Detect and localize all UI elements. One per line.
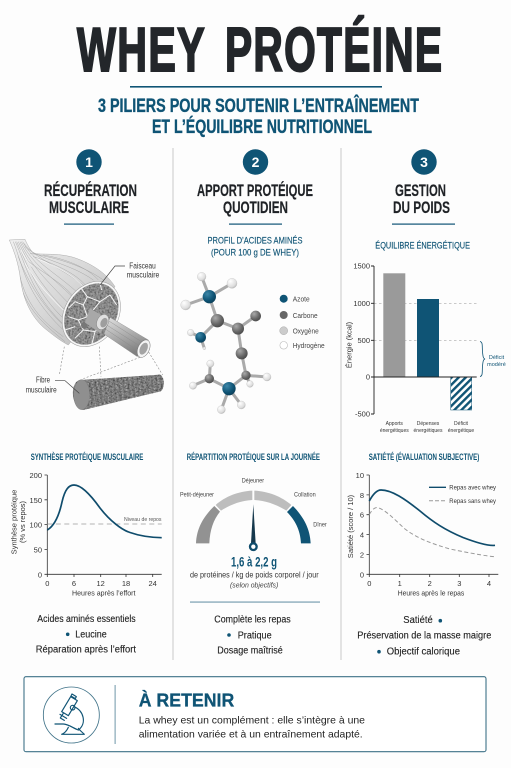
label: faisceau musculaire	[127, 261, 160, 280]
gauge: répartition protéique: 1,6 à 2,2 g	[231, 553, 277, 569]
chart: satiété: 1	[398, 579, 402, 588]
chart: équilibre énergétique: 1000	[353, 299, 370, 308]
chart: équilibre énergétique: Dépenses	[417, 421, 440, 427]
number badge 1	[76, 149, 102, 175]
chart: satiété: 4	[487, 579, 491, 588]
number badge 2: 2	[252, 154, 260, 170]
label: faisceau musculaire: musculaire	[127, 271, 160, 280]
gauge: répartition protéique: Collation	[294, 492, 316, 498]
panel: apport protéique quotidien	[180, 149, 327, 656]
heading: profil d'acides aminés: PROFIL D’ACIDES AMINÉS	[208, 236, 302, 246]
molecule	[181, 272, 271, 414]
key points: gestion du poids: Préservation de la masse maigre	[357, 631, 492, 642]
title: PROTÉINE	[225, 17, 443, 85]
label: faisceau musculaire: Faisceau	[129, 261, 156, 270]
molecule legend	[280, 294, 325, 350]
gauge: répartition protéique: Dîner	[313, 522, 327, 528]
heading: récupération musculaire: RÉCUPÉRATION	[44, 181, 137, 200]
number badge 1: 1	[85, 154, 93, 170]
bar: apports énergétiques	[383, 273, 405, 377]
chart: synthèse protéique musculaire: 6	[72, 579, 76, 588]
heading: récupération musculaire	[44, 181, 137, 225]
chart: synthèse protéique musculaire	[10, 452, 162, 598]
panel: récupération musculaire	[9, 149, 164, 655]
key points: gestion du poids: Objectif calorique	[387, 646, 460, 657]
chart: satiété: 0	[367, 579, 371, 588]
key points: gestion du poids	[357, 615, 492, 657]
gauge: répartition protéique: (selon objectifs)	[230, 581, 279, 590]
label: fibre musculaire: musculaire	[26, 385, 57, 394]
icon: microscope	[43, 687, 99, 743]
gauge: répartition protéique	[180, 452, 327, 602]
key points: apport: Pratique	[238, 630, 272, 641]
chart: équilibre énergétique: Déficit	[454, 421, 469, 427]
callout: à retenir: À RETENIR	[139, 690, 234, 711]
subtitle	[98, 86, 419, 138]
chart: synthèse protéique musculaire: Synthèse protéique	[10, 490, 18, 554]
key points: apport: Dosage maîtrisé	[217, 645, 283, 656]
number badge 3: 3	[420, 154, 428, 170]
panel: gestion du poids	[344, 149, 506, 657]
gauge: répartition protéique: Petit-déjeuner	[180, 492, 214, 498]
bar: déficit énergétique	[451, 377, 472, 410]
key points: récupération: Réparation après l’effort	[36, 644, 136, 655]
heading: apport protéique quotidien: QUOTIDIEN	[223, 199, 288, 217]
chart: satiété: 4	[360, 531, 364, 540]
chart: équilibre énergétique: 500	[357, 336, 370, 345]
chart: équilibre énergétique: ÉQUILIBRE ÉNERGÉTIQUE	[375, 240, 470, 251]
label: fibre musculaire	[26, 375, 57, 394]
number badge 3	[411, 149, 437, 175]
number badge 2	[243, 149, 268, 175]
key points: apport: Complète les repas	[214, 615, 291, 626]
chart: équilibre énergétique: -500	[355, 410, 370, 418]
callout: à retenir: La whey est un complément : elle s’intègre à une	[139, 714, 365, 726]
chart: équilibre énergétique: Énergie (kcal)	[344, 321, 354, 368]
key points: récupération: Acides aminés essentiels	[37, 614, 136, 625]
subtitle: 3 PILIERS POUR SOUTENIR L’ENTRAÎNEMENT	[98, 95, 419, 117]
label: fibre musculaire: Fibre	[36, 375, 50, 384]
molecule legend: Carbone	[293, 311, 318, 320]
title: WHEY	[77, 16, 206, 85]
gauge: répartition protéique: RÉPARTITION PROTÉIQUE SUR LA JOURNÉE	[187, 452, 320, 462]
chart: synthèse protéique musculaire: 0	[38, 570, 42, 579]
callout: à retenir	[24, 677, 486, 752]
chart: satiété: Heures après le repas	[398, 589, 465, 598]
chart: satiété: 8	[360, 491, 364, 500]
chart: synthèse protéique musculaire: 150	[29, 496, 42, 505]
chart: satiété: Satiété (score / 10)	[346, 494, 355, 558]
callout: à retenir: alimentation variée et à un entraînement adapté.	[139, 728, 363, 740]
chart: synthèse protéique musculaire: Heures après l’effort	[72, 589, 136, 598]
chart: satiété	[346, 452, 498, 598]
chart: satiété: 6	[360, 511, 364, 520]
muscle illustration	[9, 239, 164, 410]
chart legend	[429, 484, 497, 505]
chart legend: Repas sans whey	[449, 498, 497, 505]
key points: récupération	[36, 614, 136, 655]
chart: synthèse protéique musculaire: 200	[29, 471, 42, 480]
chart: synthèse protéique musculaire: Niveau de repos	[124, 517, 162, 523]
chart: synthèse protéique musculaire: (% vs repos)	[18, 500, 27, 543]
chart: satiété: 2	[428, 579, 432, 588]
key points: gestion du poids: Satiété	[403, 615, 433, 626]
heading: profil d'acides aminés: (POUR 100 g DE WHEY)	[211, 248, 299, 259]
chart: satiété: 3	[457, 579, 461, 588]
key points: récupération: Leucine	[75, 629, 107, 640]
chart: synthèse protéique musculaire: 24	[149, 579, 157, 588]
molecule legend: Oxygène	[293, 326, 319, 336]
heading: profil d'acides aminés	[208, 236, 302, 259]
molecule legend: Azote	[293, 294, 310, 304]
chart: équilibre énergétique: Apports	[386, 421, 403, 427]
molecule legend: Hydrogène	[293, 341, 325, 350]
chart: équilibre énergétique: énergétique	[448, 428, 474, 434]
chart: synthèse protéique musculaire: 100	[29, 521, 42, 530]
chart: satiété: 0	[360, 570, 364, 579]
chart: équilibre énergétique: modéré	[487, 362, 506, 368]
chart: satiété: 10	[356, 471, 364, 480]
chart: équilibre énergétique: 1500	[353, 262, 370, 270]
chart: synthèse protéique musculaire: 12	[97, 579, 105, 588]
subtitle: ET L’ÉQUILIBRE NUTRITIONNEL	[152, 116, 372, 138]
chart: équilibre énergétique: 0	[366, 372, 370, 382]
heading: récupération musculaire: MUSCULAIRE	[49, 199, 129, 217]
chart: équilibre énergétique: énergétiques	[414, 428, 443, 434]
bar: dépenses énergétiques	[417, 299, 439, 377]
chart: équilibre énergétique: Déficit	[489, 355, 505, 361]
heading: apport protéique quotidien: APPORT PROTÉIQUE	[197, 181, 313, 200]
chart: équilibre énergétique	[344, 240, 506, 434]
heading: gestion du poids	[392, 182, 455, 225]
title	[77, 16, 443, 85]
chart: synthèse protéique musculaire: 18	[122, 579, 130, 588]
chart: synthèse protéique musculaire: 50	[34, 546, 42, 554]
gauge: répartition protéique: Déjeuner	[242, 478, 264, 484]
chart: satiété: 2	[360, 550, 364, 559]
heading: gestion du poids: GESTION	[395, 182, 446, 200]
chart: équilibre énergétique: énergétiques	[380, 428, 409, 434]
chart legend: Repas avec whey	[449, 484, 497, 492]
key points: apport	[214, 615, 291, 656]
chart: synthèse protéique musculaire: 0	[45, 579, 49, 588]
heading: gestion du poids: DU POIDS	[393, 199, 450, 217]
heading: apport protéique quotidien	[197, 181, 313, 225]
chart: synthèse protéique musculaire: SYNTHÈSE PROTÉIQUE MUSCULAIRE	[31, 452, 143, 462]
gauge: répartition protéique: de protéines / kg de poids corporel / jour	[190, 570, 319, 579]
